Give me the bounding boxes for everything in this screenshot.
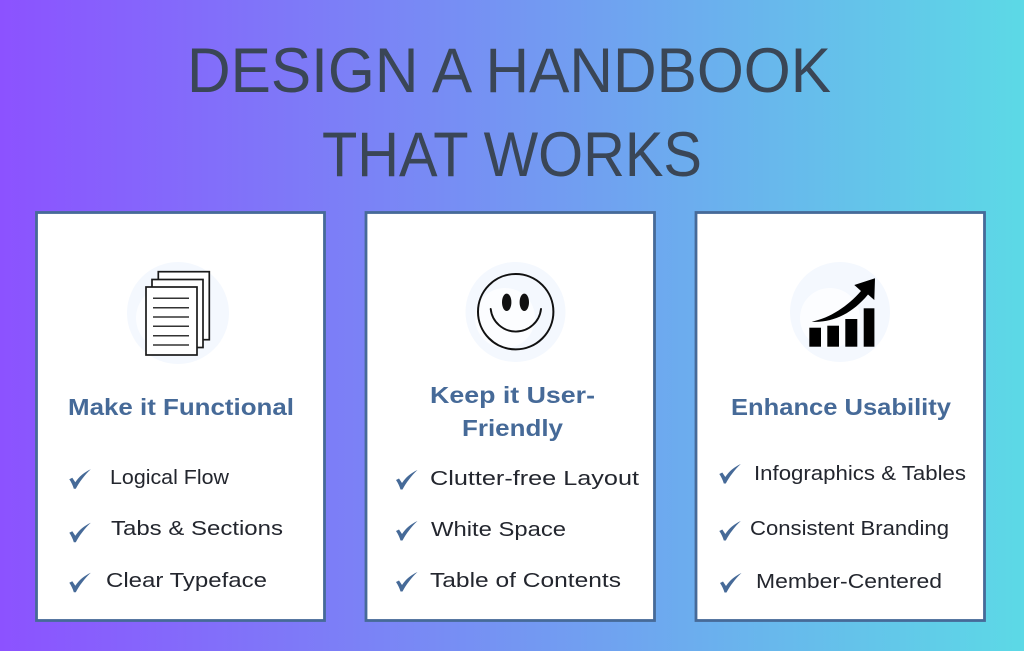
- list: user-friendly items: Table of Contents: [430, 570, 621, 592]
- icon: smiley face: [466, 262, 566, 362]
- list: usability items: Consistent Branding: [750, 518, 949, 540]
- icon: stacked documents: [127, 262, 229, 364]
- list: usability items: Infographics & Tables: [754, 463, 966, 485]
- title: THAT WORKS: [322, 120, 702, 190]
- panel: enhance usability: [696, 212, 984, 620]
- title: [187, 36, 831, 190]
- heading: keep it user-friendly: Friendly: [462, 415, 563, 441]
- list: functional items: Logical Flow: [110, 467, 230, 489]
- title: DESIGN A HANDBOOK: [187, 36, 831, 106]
- list: usability items: [719, 463, 966, 593]
- list: functional items: Clear Typeface: [106, 570, 267, 592]
- heading: make it functional: Make it Functional: [68, 394, 294, 420]
- icon: rising bar chart: [790, 262, 890, 362]
- list: functional items: [69, 467, 283, 592]
- list: functional items: Tabs & Sections: [111, 518, 283, 540]
- list: user-friendly items: White Space: [431, 519, 566, 541]
- list: usability items: Member-Centered: [756, 571, 942, 593]
- panel: keep it user-friendly: [366, 212, 654, 620]
- heading: keep it user-friendly: [430, 382, 595, 441]
- panel: make it functional: [36, 212, 324, 620]
- list: user-friendly items: Clutter-free Layout: [430, 468, 640, 490]
- heading: enhance usability: Enhance Usability: [731, 394, 951, 420]
- list: user-friendly items: [396, 468, 640, 592]
- heading: keep it user-friendly: Keep it User-: [430, 382, 595, 408]
